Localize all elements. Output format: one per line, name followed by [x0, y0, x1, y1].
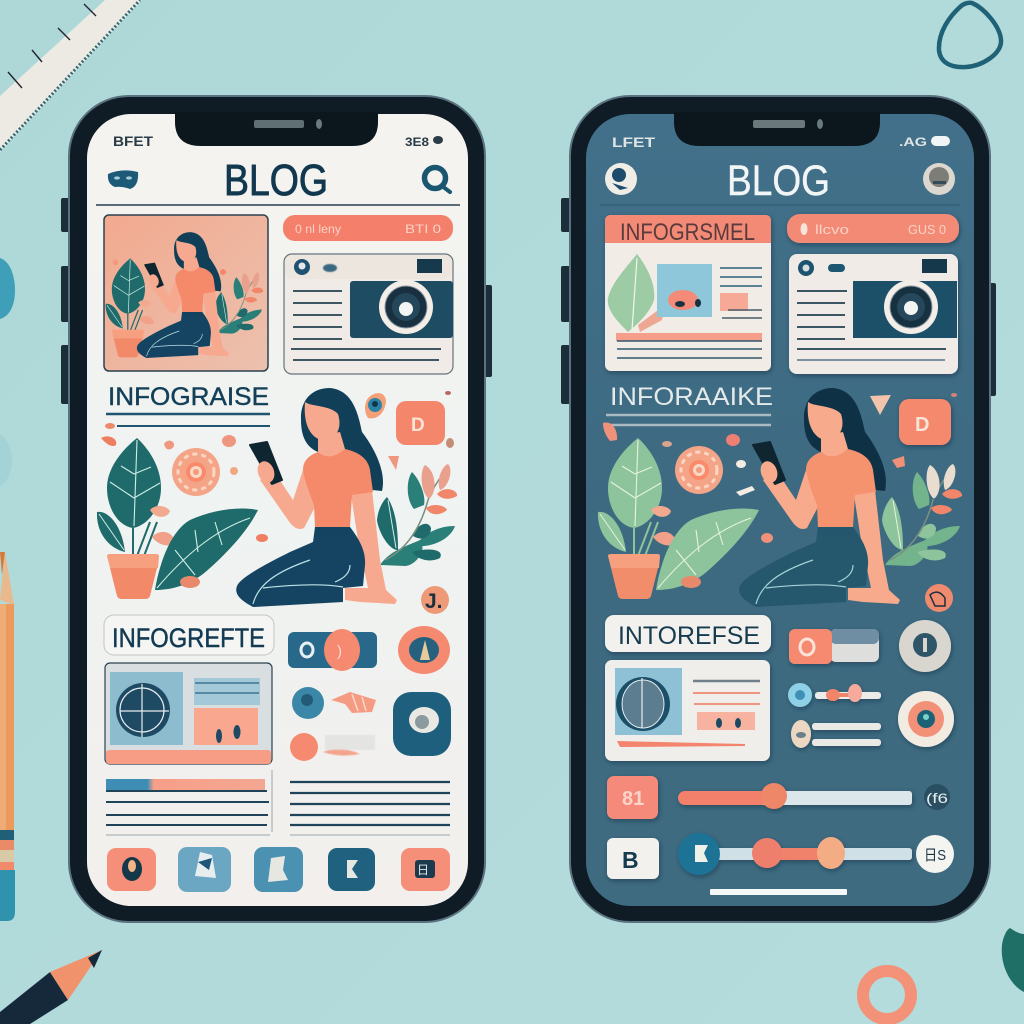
icon: right circle	[923, 163, 955, 195]
woman small	[137, 232, 229, 358]
heading: inforaaike: INFORAAIKE	[610, 383, 773, 411]
plant right small	[215, 272, 263, 334]
lateral leaf	[155, 508, 258, 590]
phone frame	[561, 96, 996, 922]
button: coral: 81	[622, 788, 644, 810]
slider small one	[788, 683, 881, 707]
plant small	[106, 258, 154, 357]
title: BLOG	[224, 156, 328, 205]
floating shapes	[101, 391, 454, 542]
icon: orange square	[396, 401, 445, 445]
badge j: J.	[425, 590, 443, 613]
text lines right	[290, 782, 450, 835]
label: interefse	[605, 615, 771, 652]
bottom nav icons: 日	[417, 863, 429, 877]
woman	[236, 388, 397, 607]
icon: eye	[365, 393, 386, 418]
ring: top right	[939, 3, 1001, 67]
teal square icon	[393, 692, 451, 756]
home bar	[710, 889, 847, 895]
blue blob decoration	[0, 258, 15, 486]
pencil: left	[0, 552, 15, 921]
icon: left circle	[605, 163, 637, 195]
pill	[787, 214, 959, 243]
coral circle with smear	[290, 733, 375, 761]
icon: orange square: D	[915, 414, 929, 436]
pill: GUS 0	[908, 222, 946, 237]
status right: 3E8	[405, 135, 429, 149]
plant right	[882, 464, 962, 566]
target circle icon	[898, 691, 954, 747]
slider: large two	[678, 833, 912, 875]
dark badge	[924, 784, 950, 810]
status right: .AG	[899, 135, 927, 149]
pill: llcvo	[815, 222, 849, 237]
pill: BTI 0	[405, 222, 441, 236]
pill: 0 nl leny	[295, 222, 341, 236]
button: white	[607, 838, 659, 879]
plant with pot	[598, 438, 677, 599]
card: infografel: INFOGRSMEL	[620, 219, 755, 246]
toggle pill: )	[337, 643, 342, 660]
pill	[283, 215, 453, 241]
button: white: B	[622, 847, 639, 873]
pencil: bottom left	[0, 950, 102, 1024]
plant with pot	[97, 438, 176, 599]
card: globe	[105, 663, 272, 764]
notch	[674, 112, 880, 146]
icon: mask menu	[108, 170, 138, 189]
teal circle with petals	[292, 687, 376, 719]
phone: dark mode	[561, 96, 996, 922]
notch	[175, 112, 378, 146]
status left: BFET	[113, 133, 153, 149]
white badge: 日S	[924, 847, 946, 864]
bottom nav icons	[107, 847, 450, 892]
floating shapes	[603, 393, 957, 543]
gray circle icon	[899, 620, 951, 672]
text lines left	[106, 770, 272, 835]
label: interefse: INTOREFSE	[618, 622, 760, 650]
icon: search	[424, 168, 450, 192]
camera card	[284, 254, 453, 374]
ring: bottom right	[863, 971, 911, 1019]
slider small two	[791, 720, 881, 748]
card: illustration	[104, 215, 268, 371]
card: globe	[605, 660, 770, 761]
leaf: bottom right	[1002, 928, 1024, 992]
icon: orange square	[899, 399, 951, 445]
divider	[600, 204, 960, 206]
heading: infograise	[105, 383, 270, 429]
status left: LFET	[612, 134, 656, 150]
label: infogrefte: INFOGREFTE	[112, 623, 265, 653]
lateral leaf	[656, 508, 759, 590]
status right	[405, 135, 443, 149]
phone: light mode	[61, 96, 492, 922]
heading: infograise: INFOGRAISE	[108, 383, 269, 411]
plant right	[377, 464, 457, 566]
badge	[925, 584, 953, 612]
dark badge: (f6	[926, 790, 948, 806]
status right	[899, 135, 950, 149]
flower	[172, 448, 220, 496]
divider	[96, 204, 460, 206]
toggle pill	[288, 629, 377, 671]
label: infogrefte	[104, 615, 274, 655]
ruler decoration	[0, 0, 142, 152]
badge j	[421, 586, 449, 614]
white badge	[916, 835, 954, 873]
flower dots	[112, 259, 226, 275]
phone frame	[61, 96, 492, 922]
slider: large one	[678, 783, 912, 809]
flower	[675, 446, 723, 494]
toggle	[789, 629, 879, 664]
card: infografel	[605, 215, 771, 371]
button: coral	[607, 776, 658, 819]
title: BLOG	[727, 157, 830, 205]
woman	[739, 388, 900, 607]
camera card	[789, 254, 958, 374]
icon: orange square: D	[411, 415, 425, 436]
coral circle icon	[398, 626, 450, 674]
